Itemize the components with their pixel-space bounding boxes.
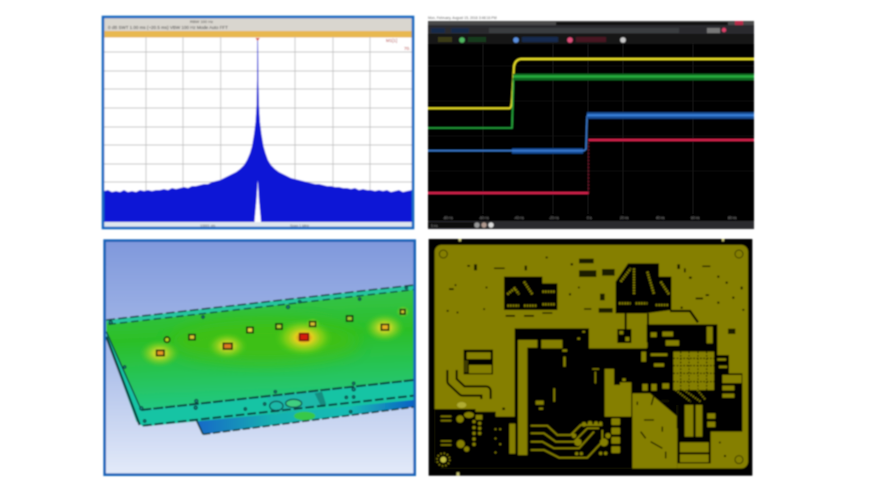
lower centre pads — [509, 418, 620, 455]
blue frame — [103, 17, 413, 228]
trace: yellow — [428, 59, 754, 108]
top edge band — [106, 285, 414, 324]
plate side face — [106, 332, 414, 427]
time axis labels: -60 ns — [479, 216, 489, 220]
instrument header bar: 0 dB SWT 1.00 ms (~20.5 ms) VBW 100 Hz Mode Auto FFT — [108, 25, 228, 30]
olive stepped plane — [605, 369, 631, 417]
chip area details — [536, 327, 742, 462]
panel: frequency spectrum plot — [102, 16, 414, 229]
infographic: four image panels — [100, 14, 756, 478]
spectrum trace — [104, 38, 412, 222]
instrument header bar — [103, 18, 413, 31]
scope caption: Mon, February, August 15, 2016 3:48:16 PM — [428, 16, 497, 20]
mounting holes — [109, 286, 408, 422]
scope graticule — [428, 44, 754, 214]
board edge marks — [457, 239, 724, 476]
marker readout: 70. — [404, 46, 410, 51]
panel: PCB layout — [429, 239, 752, 476]
lower housing — [196, 396, 414, 434]
PCB outer background — [429, 239, 752, 476]
scope footer — [428, 221, 754, 229]
time axis labels: 80 ns — [728, 216, 737, 220]
olive vertical strip — [518, 340, 537, 455]
fiducial starburst — [437, 453, 450, 466]
channel readouts — [428, 35, 754, 44]
stubs between blocks — [626, 313, 648, 330]
components on plate — [157, 310, 405, 356]
blue frame — [105, 241, 415, 475]
red trace dotted edge — [588, 140, 590, 193]
hot spots — [139, 306, 410, 367]
orange status strip — [103, 31, 413, 38]
power stage block B — [616, 263, 671, 313]
panel: thermal simulation — [105, 241, 415, 475]
time axis labels: 20 ns — [620, 216, 629, 220]
left power block — [464, 350, 493, 374]
marker readout: M1[1] — [386, 38, 397, 43]
small top chips — [474, 259, 735, 334]
dark marks on lower-right pour — [637, 395, 677, 458]
bottom axis strip — [103, 222, 413, 228]
olive pad — [541, 340, 562, 348]
peak marker — [256, 38, 260, 41]
scope footer: 5 ns — [431, 224, 438, 228]
trace: blue — [428, 115, 754, 151]
main black component region — [435, 324, 742, 468]
simulation background — [105, 241, 414, 474]
power stage block A — [504, 277, 557, 310]
scope toolbar — [428, 25, 754, 34]
centre connector area — [266, 392, 326, 420]
plate outlines — [106, 285, 414, 434]
marker readout — [386, 38, 410, 51]
time axis labels: 40 ns — [656, 216, 665, 220]
small inductor block — [617, 329, 631, 343]
mounting holes — [439, 250, 743, 464]
trace: red — [428, 140, 754, 193]
routed trace to chip — [670, 311, 698, 322]
bottom axis strip: Span 1 MHz — [290, 224, 310, 228]
time axis labels — [443, 216, 737, 220]
dense BGA mesh — [673, 352, 714, 402]
plot grid — [104, 37, 412, 222]
scope menu bar — [428, 21, 754, 25]
PCB copper pour — [435, 245, 748, 468]
lower left connector pads — [441, 402, 501, 453]
time axis labels: -40 ns — [514, 216, 524, 220]
instrument header bar: RBW 100 Hz — [190, 19, 213, 24]
bottom axis strip: 10001 pts — [200, 224, 216, 228]
time axis labels: 0 s — [587, 216, 592, 220]
scattered vias — [447, 257, 744, 457]
lower-left pad — [476, 402, 495, 412]
serpentine power trace — [452, 370, 486, 399]
time axis labels: -80 ns — [443, 216, 453, 220]
spectrum centre notch — [254, 180, 261, 222]
olive pour: lower right — [632, 393, 677, 468]
trace: green — [428, 76, 754, 128]
lower centre differential traces — [531, 425, 602, 458]
plate top face — [106, 285, 414, 410]
time axis labels: -20 ns — [549, 216, 559, 220]
panel: oscilloscope capture — [428, 16, 754, 229]
warm centre glow — [171, 320, 358, 363]
time axis labels: 60 ns — [691, 216, 700, 220]
